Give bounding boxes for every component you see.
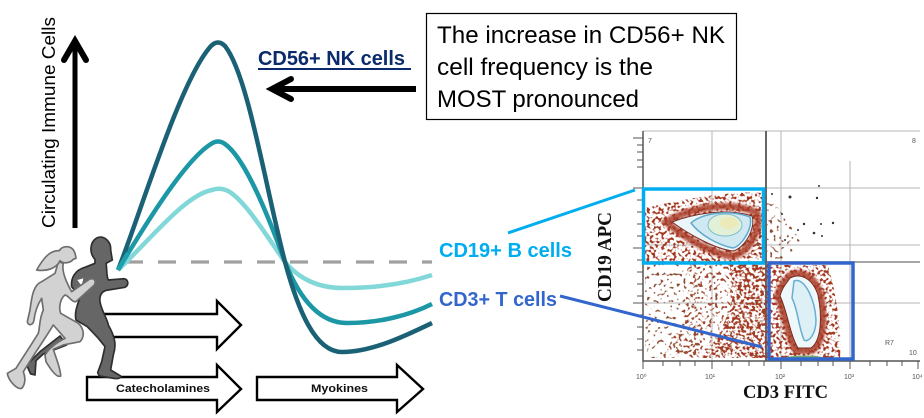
- green band on axis: [775, 356, 832, 360]
- leader line: T cells: [560, 296, 762, 347]
- icon: male runner: [27, 237, 128, 379]
- arrow: catecholamines: Catecholamines: [116, 383, 210, 395]
- callout box: [426, 14, 736, 120]
- label: CD19+ B cells: CD19+ B cells: [439, 240, 572, 262]
- axis tick labels: 8: [912, 138, 916, 145]
- axis tick labels: R7: [885, 340, 894, 347]
- axis tick labels: [636, 138, 923, 381]
- upper signal arrow: [100, 301, 241, 349]
- plot grid: [643, 131, 920, 361]
- axis tick labels: 10³: [844, 374, 855, 381]
- icon: female runner: [7, 247, 95, 389]
- gate: CD3+ T cells: [769, 263, 853, 359]
- arrow: myokines: [257, 365, 423, 412]
- response curves: [118, 42, 432, 352]
- axis tick labels: 10: [909, 350, 917, 357]
- axis tick labels: 10²: [775, 374, 786, 381]
- curve: light teal: [118, 189, 432, 288]
- quadrant divider: [765, 131, 767, 361]
- contour: B cells: [672, 212, 753, 251]
- axes: [643, 131, 920, 361]
- y-axis arrow: circulating immune cells: [64, 41, 86, 228]
- callout box: MOST pronounced: [437, 86, 639, 113]
- outlier events: [771, 185, 834, 241]
- arrow: myokines: Myokines: [311, 383, 368, 395]
- scatter: mid density band: [660, 264, 768, 358]
- baseline dashed line: [125, 260, 432, 264]
- scatter: dense lower band: [700, 264, 768, 358]
- contour: T cells: [780, 276, 820, 348]
- arrow: callout to peak: [272, 79, 416, 99]
- leader line: B cells: [508, 190, 635, 233]
- scatter: B cell population: [645, 192, 764, 262]
- y-axis label: Circulating Immune Cells: [39, 17, 59, 228]
- label: CD56+ NK cells: CD56+ NK cells: [258, 48, 405, 70]
- flow cytometry plot: [633, 131, 923, 381]
- curve: medium teal: [118, 142, 432, 323]
- label: CD3+ T cells: CD3+ T cells: [439, 289, 557, 311]
- axis tick labels: 7: [648, 138, 652, 145]
- axis ticks: [633, 138, 918, 369]
- axis tick labels: 10⁴: [912, 374, 923, 381]
- callout box: The increase in CD56+ NK: [437, 22, 725, 49]
- dense ring: T cells: [778, 274, 822, 350]
- icon: male runner arm gap: [77, 278, 83, 286]
- curve start highlight: [118, 253, 128, 270]
- callout box: cell frequency is the: [437, 54, 653, 81]
- axis tick labels: 10⁰: [636, 373, 647, 381]
- dense ring: B cells: [666, 206, 758, 256]
- scatter: sparse events: [645, 264, 700, 358]
- axis label: CD3 FITC: CD3 FITC: [743, 382, 828, 403]
- axis label: CD19 APC: CD19 APC: [594, 212, 616, 302]
- scatter: T cell population: [770, 265, 840, 358]
- arrow: catecholamines: [87, 365, 241, 412]
- axis tick labels: 10¹: [705, 374, 716, 381]
- curve: dark teal: [118, 42, 432, 352]
- icon: runners: [7, 237, 128, 389]
- gate: CD19+ B cells: [644, 189, 764, 263]
